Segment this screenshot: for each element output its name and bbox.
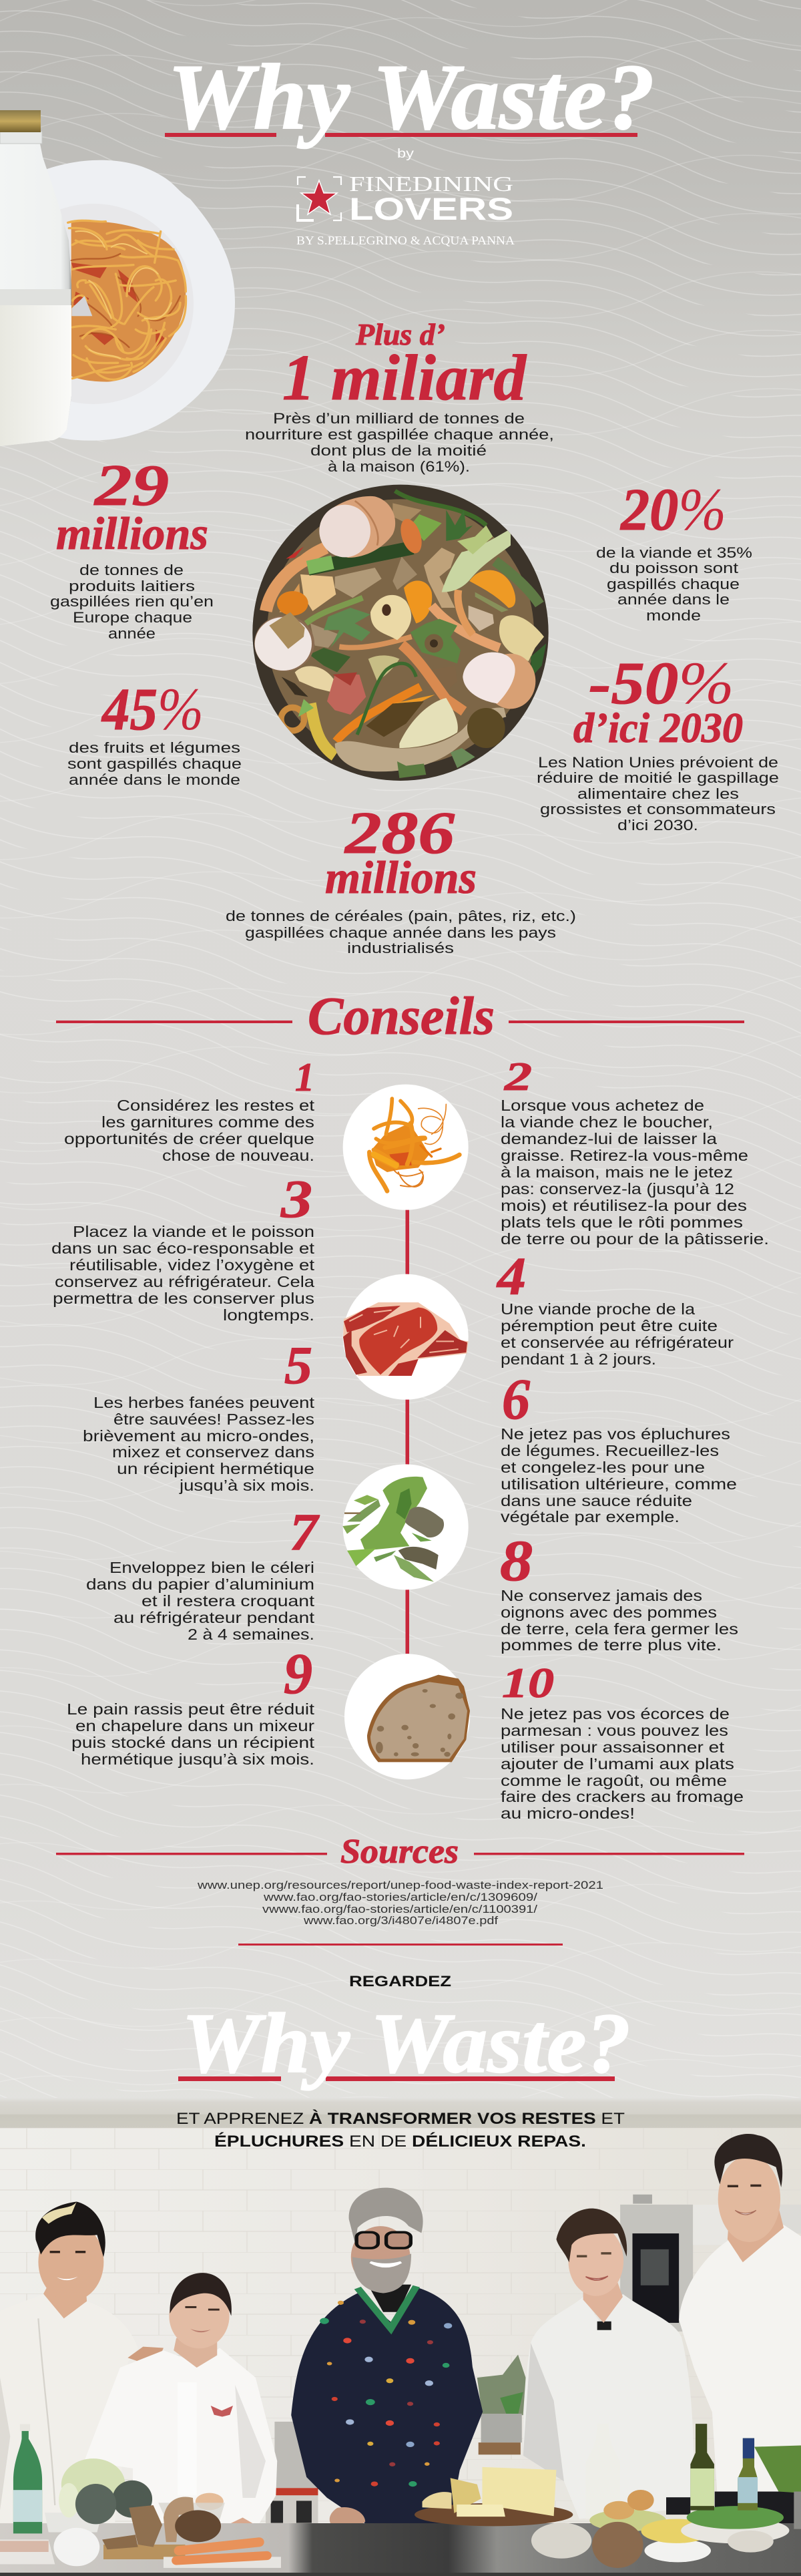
stat: -50% d'ici 2030: réduire de moitié le gaspillage — [537, 769, 779, 786]
stat: 1 miliard — [245, 317, 554, 475]
tip 6: Ne jetez pas vos épluchures — [501, 1425, 730, 1443]
counter bottom edge — [0, 2573, 801, 2576]
stat: 20% — [596, 477, 752, 624]
heading: Conseils: Conseils — [308, 987, 495, 1046]
tip 6: de légumes. Recueillez-les — [501, 1442, 719, 1459]
tip 1: Considérez les restes et — [117, 1097, 315, 1114]
tip 7: au réfrigérateur pendant — [113, 1609, 315, 1626]
logo: Fine Dining Lovers: LOVERS — [349, 191, 513, 226]
tip 10: au micro-ondes! — [501, 1805, 635, 1822]
tip 2: plats tels que le rôti pommes — [501, 1214, 743, 1231]
tip 10: ajouter de l’umami aux plats — [501, 1755, 734, 1773]
tip 10: 10 — [502, 1659, 554, 1706]
stat: -50% d'ici 2030 — [537, 651, 779, 834]
by line: by — [397, 147, 415, 161]
image circle: raw meat — [343, 1274, 469, 1400]
stat: 29 millions: produits laitiers — [69, 578, 195, 594]
image circle: carrot peels — [343, 1085, 469, 1210]
stat: -50% d'ici 2030: Les Nation Unies prévoient de — [538, 754, 778, 771]
tip 6: utilisation ultérieure, comme — [501, 1475, 737, 1493]
tip 3: conservez au réfrigérateur. Cela — [55, 1273, 314, 1290]
person: woman chef right — [523, 2209, 694, 2519]
food left — [0, 2424, 281, 2568]
stat: 29 millions — [50, 453, 214, 642]
stat: 20%: de la viande et 35% — [596, 544, 752, 561]
stat: 45%: des fruits et légumes — [69, 739, 240, 756]
tip 3: longtemps. — [223, 1306, 314, 1324]
tip 8: pommes de terre plus vite. — [501, 1636, 722, 1654]
stat: 286 millions: millions — [325, 852, 477, 903]
tip 7: Enveloppez bien le céleri — [109, 1559, 314, 1576]
tip 10: Ne jetez pas vos écorces de — [501, 1705, 730, 1722]
stat: 45%: sont gaspillés chaque — [67, 755, 242, 772]
title: Why Waste? — [168, 45, 655, 149]
heading: Sources: Sources — [340, 1833, 459, 1871]
spaghetti — [68, 220, 186, 382]
tip 5 — [83, 1336, 315, 1494]
tip 8: 8 — [500, 1528, 533, 1593]
stat: -50% d'ici 2030: d’ici 2030 — [573, 704, 743, 751]
tip 9: 9 — [284, 1641, 312, 1706]
tip 3: Placez la viande et le poisson — [73, 1223, 314, 1240]
call to action text — [176, 2109, 625, 2151]
tip 3: réutilisable, videz l’oxygène et — [69, 1256, 315, 1274]
tip 6: et congelez-les pour une — [501, 1459, 705, 1476]
stat: 1 miliard: Plus d’ — [355, 317, 445, 351]
person: woman in white shirt — [84, 2273, 277, 2535]
tip 8: Ne conservez jamais des — [501, 1587, 702, 1604]
stat: 286 millions: industrialisés — [347, 940, 454, 956]
counter — [0, 2523, 801, 2576]
image circle: wilted herbs — [342, 1464, 469, 1590]
heading: Conseils — [56, 987, 744, 1046]
logo: Fine Dining Lovers: BY S.PELLEGRINO & ACQUA PANNA — [296, 234, 515, 247]
logo on shirt — [211, 2406, 233, 2417]
tip 2: mois) et réutilisez-la pour des — [501, 1197, 747, 1214]
tip 4: et conservée au réfrigérateur — [501, 1334, 734, 1351]
tip 7 — [86, 1503, 320, 1643]
tip 4: péremption peut être cuite — [501, 1317, 718, 1334]
tip 2: graisse. Retirez-la vous-même — [501, 1147, 748, 1164]
call to action text: ET APPRENEZ À TRANSFORMER VOS RESTES ET — [176, 2109, 625, 2128]
tip 3 — [51, 1170, 315, 1324]
tip 9: Le pain rassis peut être réduit — [67, 1700, 315, 1718]
stat: 20%: du poisson sont — [609, 560, 738, 576]
photo: milk bottle — [0, 110, 71, 446]
tip 5: un récipient hermétique — [117, 1460, 314, 1477]
stat: 45% — [67, 677, 242, 788]
food right — [415, 2424, 801, 2568]
tip 4: Une viande proche de la — [501, 1300, 695, 1318]
tip 8 — [500, 1528, 738, 1654]
stat: 286 millions: de tonnes de céréales (pain, pâtes, riz, etc.) — [226, 908, 576, 924]
heading: Sources — [56, 1833, 744, 1871]
stat: 20%: année dans le — [617, 591, 730, 608]
tip 2: de terre ou pour de la pâtisserie. — [501, 1230, 769, 1248]
stat: 20%: gaspillés chaque — [607, 576, 740, 592]
tip 4: pendant 1 à 2 jours. — [501, 1350, 656, 1368]
tip 5: être sauvées! Passez-les — [113, 1411, 314, 1428]
tip 8: de terre, cela fera germer les — [501, 1620, 738, 1638]
tip 3: permettra de les conserver plus — [53, 1290, 314, 1307]
tip 5: mixez et conservez dans — [112, 1443, 314, 1461]
logo: Fine Dining Lovers: FINEDINING — [349, 172, 513, 196]
source links: www.fao.org/fao-stories/article/en/c/1309609/ — [263, 1891, 538, 1903]
photo: chefs in kitchen — [0, 2098, 801, 2576]
stat: 20%: 20% — [619, 477, 726, 543]
tip 7: 2 à 4 semaines. — [188, 1626, 314, 1643]
tip 10: utiliser pour assaisonner et — [501, 1738, 725, 1756]
tip 1 — [64, 1055, 315, 1164]
stat: 29 millions: de tonnes de — [79, 562, 184, 578]
label: regardez: REGARDEZ — [349, 1973, 451, 1990]
image circle: bread — [344, 1654, 470, 1779]
tip 6: végétale par exemple. — [501, 1508, 680, 1525]
tip 8: oignons avec des pommes — [501, 1604, 717, 1621]
stat: 286 millions: gaspillées chaque année dans les pays — [245, 924, 556, 941]
tip 2: 2 — [504, 1055, 532, 1099]
tip 5: 5 — [284, 1336, 312, 1395]
photo: plate of spaghetti — [0, 160, 235, 441]
stat: 29 millions: année — [108, 625, 156, 642]
wall — [0, 2098, 801, 2525]
call to action text: ÉPLUCHURES EN DE DÉLICIEUX REPAS. — [214, 2132, 586, 2151]
tip 10: comme le ragoût, ou même — [501, 1772, 727, 1789]
tip 1: 1 — [295, 1055, 314, 1099]
stat: 20%: monde — [646, 607, 701, 624]
tip 9: en chapelure dans un mixeur — [75, 1717, 314, 1734]
tip 7: et il restera croquant — [142, 1592, 315, 1610]
tip 9 — [67, 1641, 315, 1768]
stat: 1 miliard: Près d’un milliard de tonnes de — [273, 410, 525, 427]
icon: red star — [301, 180, 337, 214]
stat: 1 miliard: nourriture est gaspillée chaque année, — [245, 426, 554, 443]
tip 3: 3 — [280, 1170, 312, 1229]
tip 9: hermétique jusqu’à six mois. — [81, 1751, 314, 1768]
stat: 29 millions: gaspillées rien qu’en — [50, 593, 214, 610]
tip 6: dans une sauce réduite — [501, 1492, 692, 1509]
connector line — [406, 1210, 409, 1654]
stat: 29 millions: Europe chaque — [73, 609, 192, 626]
stat: 286 millions — [226, 800, 576, 956]
tip 10: parmesan : vous pouvez les — [501, 1722, 728, 1739]
tip 10 — [501, 1659, 744, 1822]
stat: 1 miliard: dont plus de la moitié — [310, 442, 487, 459]
herbs in pots — [477, 2354, 526, 2415]
tip 5: jusqu’à six mois. — [179, 1477, 314, 1494]
stat: -50% d'ici 2030: alimentaire chez les — [577, 785, 739, 802]
range behind counter — [266, 2422, 318, 2527]
stat: -50% d'ici 2030: grossistes et consommateurs — [540, 801, 776, 817]
stat: 45%: 45% — [101, 677, 204, 743]
divider — [238, 1944, 563, 1946]
person: Massimo Bottura — [291, 2188, 483, 2534]
stat: 45%: année dans le monde — [69, 771, 240, 788]
tip 5: brièvement au micro-ondes, — [83, 1427, 314, 1445]
tip 1: les garnitures comme des — [101, 1113, 314, 1131]
bottle cap — [0, 110, 41, 132]
tip 4 — [496, 1248, 734, 1368]
tip 2 — [501, 1055, 769, 1248]
tip 2: demandez-lui de laisser la — [501, 1130, 717, 1147]
tip 10: faire des crackers au fromage — [501, 1788, 744, 1805]
logo: Fine Dining Lovers — [296, 172, 515, 247]
tip 5: Les herbes fanées peuvent — [93, 1394, 315, 1411]
tip 6: 6 — [502, 1366, 530, 1431]
tip 2: Lorsque vous achetez de — [501, 1097, 704, 1114]
tip 4: 4 — [496, 1248, 526, 1306]
tip 7: dans du papier d’aluminium — [86, 1576, 314, 1593]
stat: -50% d'ici 2030: -50% — [589, 651, 734, 717]
source links: vwww.fao.org/fao-stories/article/en/c/1100391/ — [262, 1903, 538, 1915]
source links: www.fao.org/3/i4807e/i4807e.pdf — [303, 1915, 498, 1927]
source links — [197, 1879, 603, 1927]
title: Why Waste? (repeat): Why Waste? — [182, 1996, 631, 2090]
oven — [477, 2195, 801, 2454]
photo: food waste bowl — [252, 485, 549, 781]
tip 6 — [501, 1366, 737, 1525]
tip 3: dans un sac éco-responsable et — [51, 1240, 315, 1257]
stat: -50% d'ici 2030: d’ici 2030. — [617, 817, 698, 834]
stat: 1 miliard: à la maison (61%). — [328, 458, 470, 475]
tip 2: à la maison, mais ne le jetez — [501, 1163, 733, 1181]
tip 2: la viande chez le boucher, — [501, 1113, 713, 1131]
stat: 29 millions: 29 — [93, 453, 169, 518]
sweater motifs — [320, 2301, 452, 2487]
stat: 29 millions: millions — [56, 508, 208, 559]
tip 1: opportunités de créer quelque — [64, 1130, 314, 1147]
stat: 1 miliard: 1 miliard — [282, 342, 527, 414]
tip 7: 7 — [290, 1503, 320, 1561]
person: chef left — [0, 2202, 164, 2535]
stat: 286 millions: 286 — [344, 800, 455, 866]
source links: www.unep.org/resources/report/unep-food-waste-index-report-2021 — [197, 1879, 603, 1891]
tip 1: chose de nouveau. — [162, 1147, 314, 1164]
tip 9: puis stocké dans un récipient — [71, 1734, 315, 1751]
tip 2: pas: conservez-la (jusqu’à 12 — [501, 1180, 734, 1198]
person: tall chef right — [666, 2134, 801, 2526]
